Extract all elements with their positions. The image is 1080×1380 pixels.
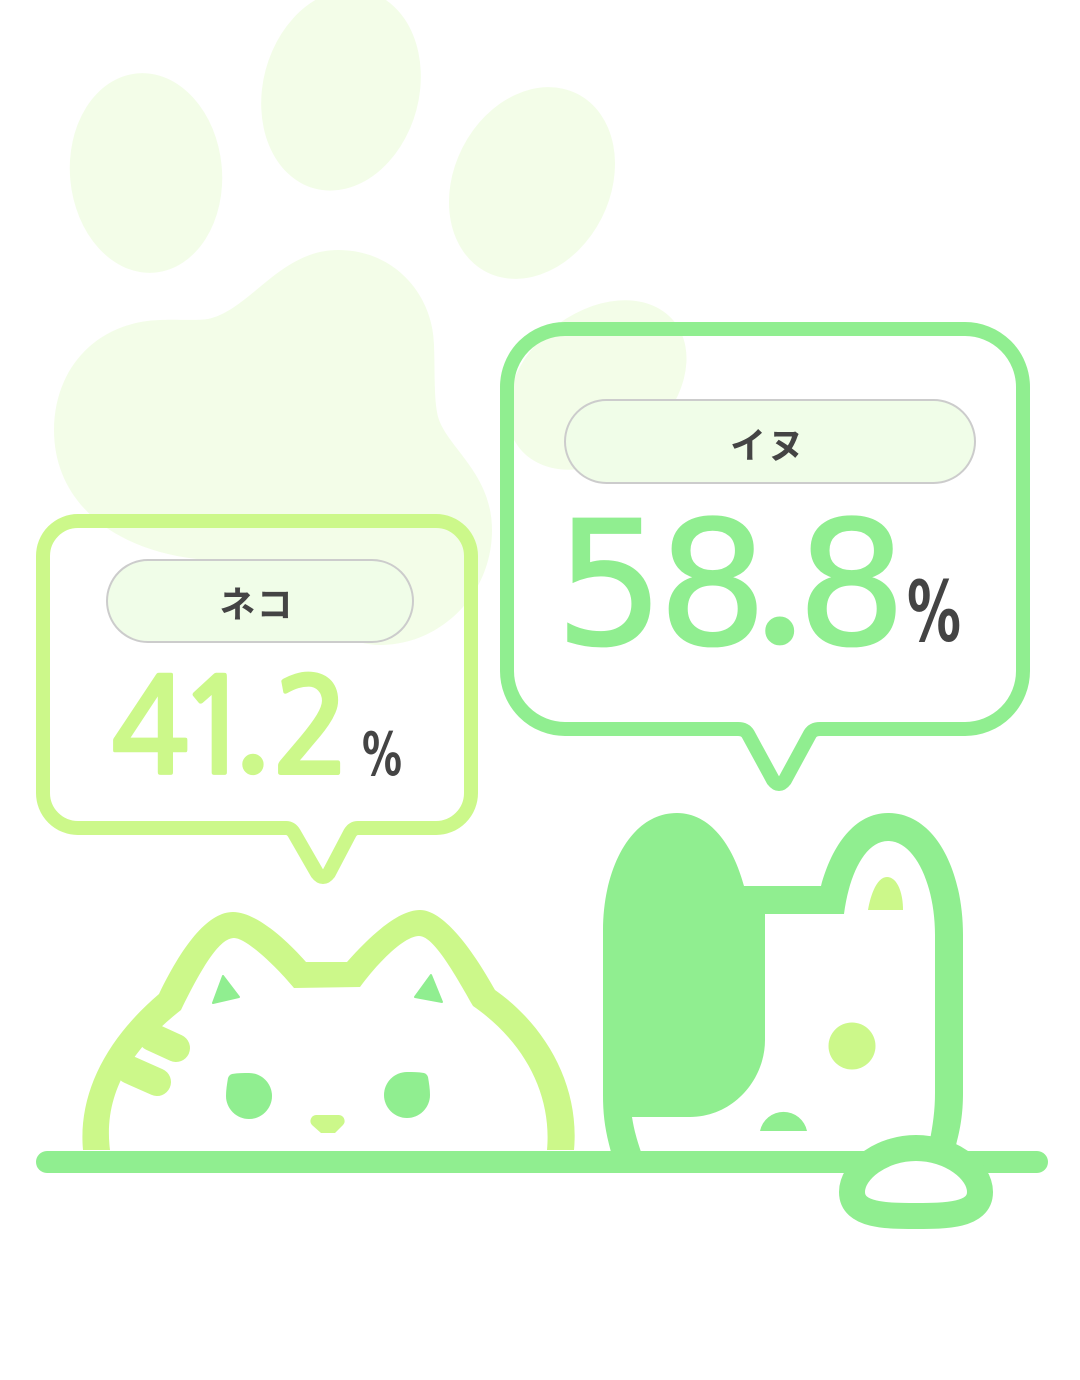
cat head outline [82, 910, 575, 1150]
cat label pill: ネコ [219, 584, 295, 625]
cat ear inner marks [213, 975, 442, 1003]
dog percentage: 8 [797, 484, 906, 685]
cat percentage: . [232, 654, 272, 786]
cat percentage: % [362, 720, 402, 790]
dog label pill [565, 400, 975, 483]
cat bubble outline [43, 521, 471, 877]
dog illustration [603, 813, 980, 1216]
dog label pill: イヌ [730, 425, 806, 466]
cat percentage [110, 654, 402, 794]
dog head and dark ear patch [603, 813, 963, 1152]
dog nose [760, 1112, 807, 1131]
dog percentage: . [752, 486, 805, 660]
background paw print [54, 0, 720, 645]
cat percentage: 2 [271, 662, 352, 794]
cat percentage: 41 [110, 662, 257, 794]
dog percentage: % [907, 563, 961, 661]
cat whiskers [130, 1037, 176, 1082]
dog percentage: 58 [555, 484, 767, 685]
cat eyes [226, 1072, 430, 1119]
table line [36, 1151, 1048, 1173]
dog paw [852, 1148, 980, 1216]
cat speech bubble [43, 521, 471, 877]
dog eye [828, 1022, 876, 1070]
dog speech bubble [507, 329, 1023, 784]
dog inner ear [868, 877, 903, 910]
cat illustration [82, 910, 575, 1150]
dog bubble outline [507, 329, 1023, 784]
dog percentage [555, 484, 961, 685]
cat nose [310, 1115, 345, 1133]
cat label pill [107, 560, 413, 642]
